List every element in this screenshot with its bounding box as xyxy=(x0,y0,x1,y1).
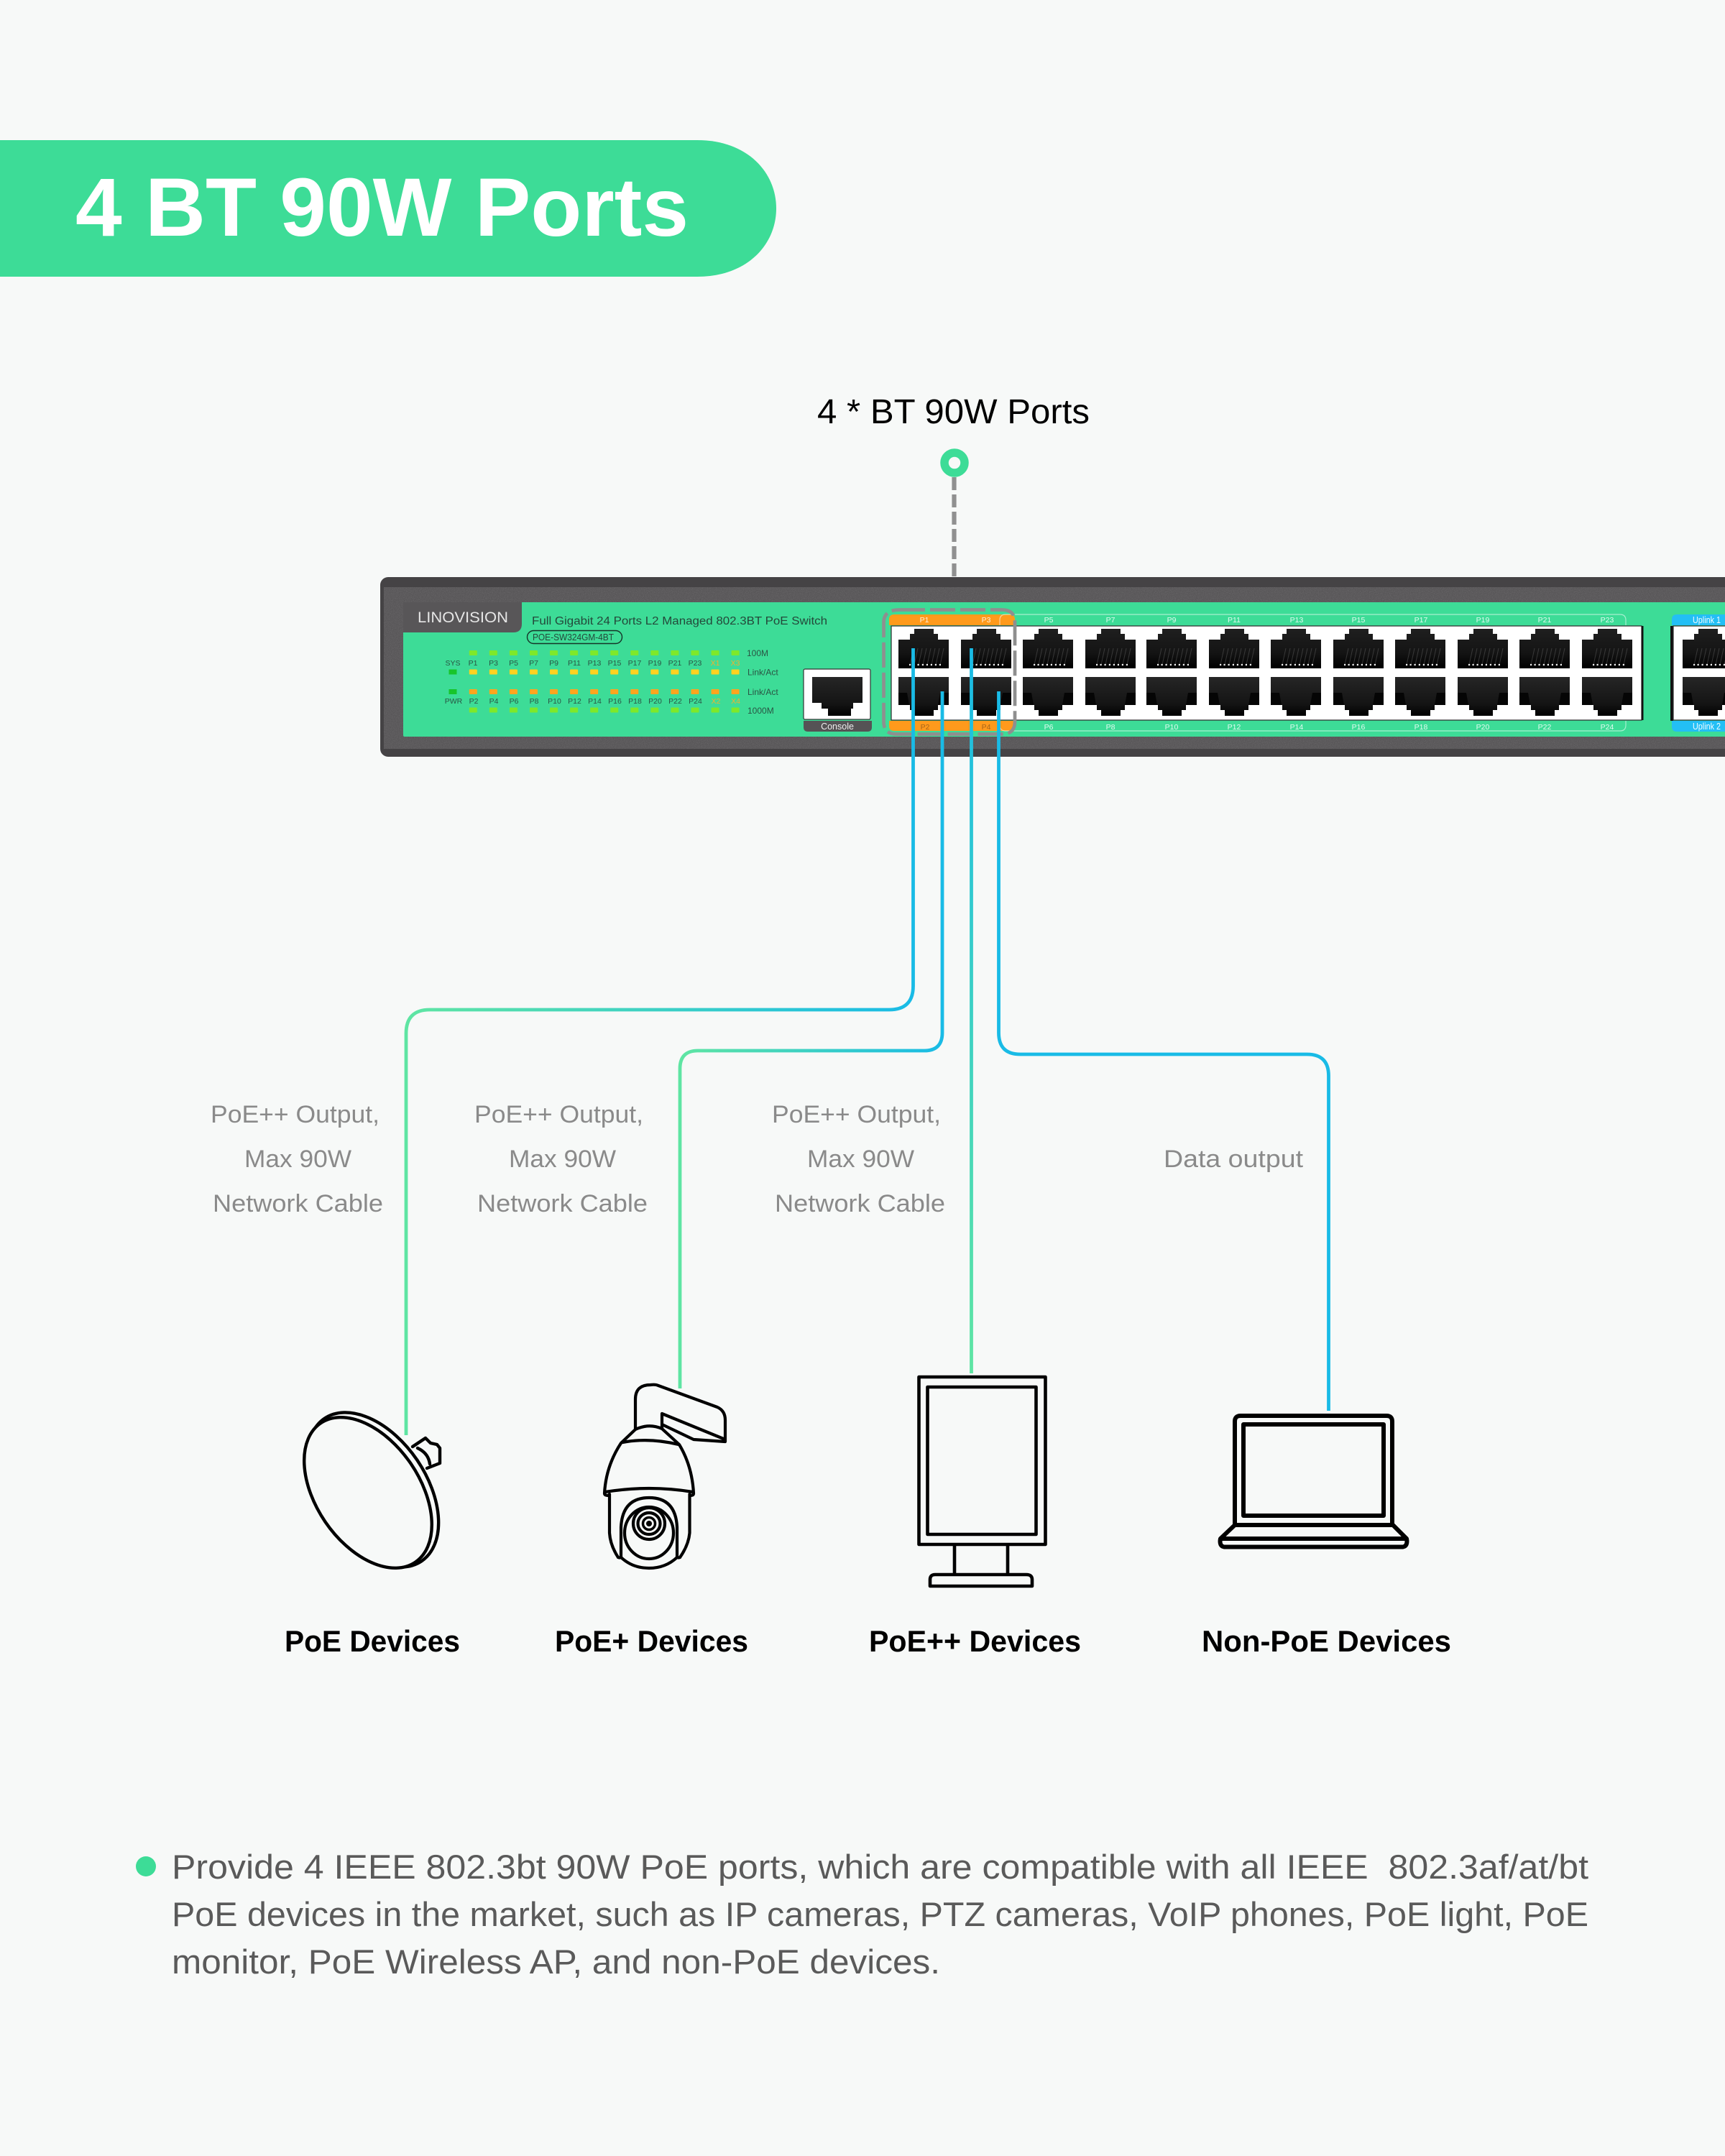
bottom port number labels: P2 xyxy=(921,723,930,732)
cable to PoE++ device xyxy=(970,648,973,1373)
product description: Full Gigabit 24 Ports L2 Managed 802.3BT PoE Switch xyxy=(532,615,827,627)
annotation: PoE+ device cable xyxy=(474,1101,648,1217)
annotation: PoE++ device cable xyxy=(772,1101,945,1217)
annotation: PoE+ device cable: Network Cable xyxy=(477,1190,648,1217)
LED bottom labels: P24 xyxy=(689,697,702,706)
annotation: PoE device cable xyxy=(211,1101,383,1217)
LED bottom labels: PWR xyxy=(445,697,463,706)
LED bottom labels: P16 xyxy=(608,697,622,706)
top port number labels: P5 xyxy=(1044,616,1054,625)
callout: 4 BT 90W ports label with pin xyxy=(817,393,1090,577)
uplink port block: Uplink 2 xyxy=(1693,722,1721,732)
LED bottom labels: P20 xyxy=(648,697,662,706)
white outline around standard port labels xyxy=(1000,614,1626,731)
icon: wireless AP dish xyxy=(278,1388,466,1591)
bottom port number labels: P4 xyxy=(982,723,991,732)
bullet dot xyxy=(136,1856,156,1876)
LED legend labels: Link/Act xyxy=(748,667,778,677)
icon: laptop xyxy=(1220,1416,1407,1547)
LED bottom labels: P22 xyxy=(668,697,682,706)
LED top labels: P23 xyxy=(689,659,702,668)
callout text: 4 * BT 90W Ports xyxy=(817,393,1090,431)
cable to PoE device xyxy=(406,648,913,1435)
orange BT port labels xyxy=(889,614,1015,731)
LED top labels: SYS xyxy=(445,659,461,668)
description text: PoE devices in the market, such as IP cameras, PTZ cameras, VoIP phones, PoE light, PoE xyxy=(172,1895,1588,1933)
bottom port number labels: P6 xyxy=(1044,723,1054,732)
LED top labels: P9 xyxy=(549,659,558,668)
LED top labels: P1 xyxy=(469,659,478,668)
LED top labels: P5 xyxy=(509,659,518,668)
top port number labels: P23 xyxy=(1601,616,1614,625)
uplink port block: Uplink 1 xyxy=(1693,615,1721,625)
annotation: PoE+ device cable: PoE++ Output, xyxy=(474,1101,643,1128)
LED legend labels xyxy=(747,648,778,716)
LED legend labels: Link/Act xyxy=(748,687,778,697)
model number pill: POE-SW324GM-4BT xyxy=(533,632,614,642)
top port number labels: P3 xyxy=(982,616,991,625)
LED legend labels: 100M xyxy=(747,648,768,658)
top port number labels: P21 xyxy=(1538,616,1551,625)
cable to non-PoE device xyxy=(999,691,1328,1411)
LED top labels: P21 xyxy=(668,659,681,668)
LED bottom labels: P18 xyxy=(628,697,642,706)
top port number labels: P7 xyxy=(1106,616,1116,625)
LED legend labels: 1000M xyxy=(748,706,774,716)
icon: PoE monitor xyxy=(919,1377,1045,1586)
label: Non-PoE Devices: Non-PoE Devices xyxy=(1202,1624,1451,1658)
cable to PoE+ device xyxy=(680,691,942,1388)
label: PoE Devices: PoE Devices xyxy=(285,1624,460,1658)
top port number labels: P1 xyxy=(920,616,929,625)
dashed highlight around BT ports xyxy=(884,609,1015,734)
banner title text: 4 BT 90W Ports xyxy=(75,162,689,254)
LED top labels: P3 xyxy=(489,659,498,668)
cable annotations xyxy=(211,1101,1304,1217)
label: PoE++ Devices: PoE++ Devices xyxy=(869,1624,1081,1658)
description text xyxy=(172,1848,1588,1981)
brand tab xyxy=(403,602,522,632)
device labels xyxy=(285,1624,1451,1658)
LED top labels: P19 xyxy=(648,659,661,668)
top port number labels xyxy=(920,616,1614,625)
LED top labels: P15 xyxy=(608,659,621,668)
annotation: PoE++ device cable: PoE++ Output, xyxy=(772,1101,941,1128)
network switch xyxy=(380,577,1725,757)
description text: Provide 4 IEEE 802.3bt 90W PoE ports, which are compatible with all IEEE 802.3af/at/bt xyxy=(172,1848,1588,1886)
bottom port number labels: P14 xyxy=(1290,723,1303,732)
LED bottom labels xyxy=(445,697,740,706)
LED rows xyxy=(467,647,744,716)
annotation: data output: Data output xyxy=(1164,1146,1304,1173)
LED top labels: P7 xyxy=(529,659,538,668)
LED top labels: X1 xyxy=(711,659,720,668)
model number pill xyxy=(528,631,622,644)
chassis textured band xyxy=(384,587,1725,749)
bottom port number labels: P16 xyxy=(1352,723,1365,732)
LED bottom labels: P10 xyxy=(548,697,561,706)
uplink port block xyxy=(1670,614,1725,732)
switch chassis xyxy=(380,577,1725,757)
top port number labels: P19 xyxy=(1476,616,1489,625)
callout dashed leader xyxy=(952,477,957,577)
annotation: PoE++ device cable: Max 90W xyxy=(807,1146,914,1173)
LED top labels: P11 xyxy=(568,659,581,668)
brand tab: LINOVISION xyxy=(418,609,508,626)
annotation: PoE+ device cable: Max 90W xyxy=(509,1146,616,1173)
bottom port number labels xyxy=(921,723,1614,732)
banner pill xyxy=(0,140,776,277)
label: PoE+ Devices: PoE+ Devices xyxy=(555,1624,748,1658)
bottom port number labels: P22 xyxy=(1538,723,1551,732)
console port xyxy=(804,669,872,732)
icon: PTZ camera xyxy=(604,1385,725,1568)
callout ring marker xyxy=(944,453,965,473)
LED top labels: P13 xyxy=(588,659,601,668)
LED top labels: X3 xyxy=(731,659,740,668)
LED bottom labels: P8 xyxy=(530,697,539,706)
top port number labels: P11 xyxy=(1228,616,1241,625)
annotation: PoE device cable: Max 90W xyxy=(244,1146,351,1173)
LED top labels: P17 xyxy=(628,659,641,668)
green faceplate xyxy=(403,602,1725,737)
LED bottom labels: X4 xyxy=(731,697,740,706)
top port number labels: P9 xyxy=(1167,616,1177,625)
cables xyxy=(406,648,1328,1435)
title banner xyxy=(0,140,776,277)
bottom port number labels: P8 xyxy=(1106,723,1116,732)
bottom port number labels: P18 xyxy=(1414,723,1427,732)
LED bottom labels: P14 xyxy=(588,697,602,706)
top port number labels: P13 xyxy=(1290,616,1303,625)
main RJ45 port block xyxy=(891,626,1643,720)
LED bottom labels: P2 xyxy=(469,697,479,706)
bottom port number labels: P10 xyxy=(1165,723,1178,732)
LED bottom labels: P4 xyxy=(489,697,499,706)
bottom port number labels: P12 xyxy=(1228,723,1241,732)
annotation: PoE++ device cable: Network Cable xyxy=(775,1190,945,1217)
bullet description xyxy=(136,1848,1588,1981)
system and power LEDs xyxy=(448,670,457,674)
bottom port number labels: P24 xyxy=(1601,723,1614,732)
bottom port number labels: P20 xyxy=(1476,723,1489,732)
LED bottom labels: P12 xyxy=(568,697,581,706)
LED bottom labels: X2 xyxy=(712,697,721,706)
LED bottom labels: P6 xyxy=(510,697,519,706)
annotation: PoE device cable: PoE++ Output, xyxy=(211,1101,380,1128)
description text: monitor, PoE Wireless AP, and non-PoE devices. xyxy=(172,1943,940,1981)
LED indicator panel xyxy=(445,647,778,716)
console port: Console xyxy=(821,722,854,732)
top port number labels: P17 xyxy=(1414,616,1427,625)
LED top labels xyxy=(445,659,740,668)
top port number labels: P15 xyxy=(1352,616,1365,625)
annotation: PoE device cable: Network Cable xyxy=(213,1190,383,1217)
